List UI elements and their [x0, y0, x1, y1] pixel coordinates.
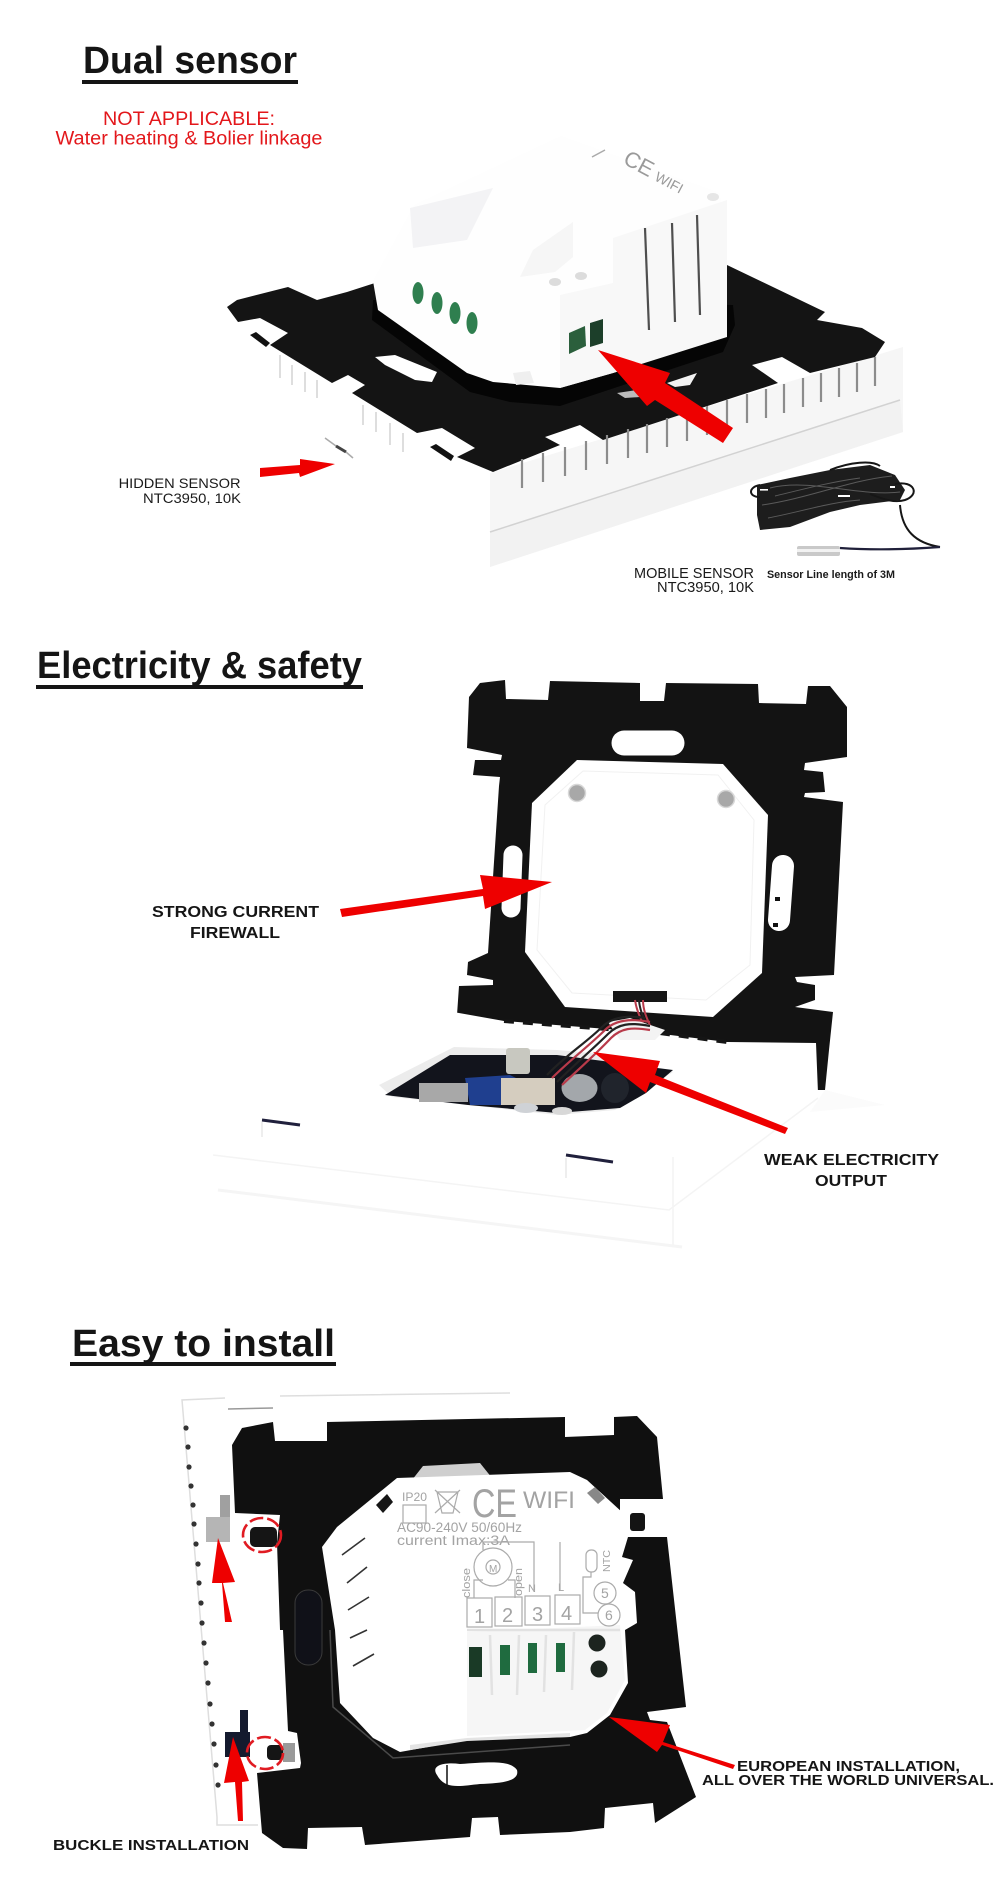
arrow: to european installation	[609, 1717, 735, 1769]
label: buckle installation: BUCKLE INSTALLATION	[53, 1838, 249, 1854]
notice: not applicable: NOT APPLICABLE:	[103, 109, 275, 130]
product photo: thermostat rear view: WIFI	[523, 1487, 575, 1514]
arrow: to hidden sensor	[260, 459, 335, 477]
product photo: open thermostat	[213, 680, 885, 1247]
label: strong current firewall: FIREWALL	[190, 925, 280, 942]
panel: easy to install	[53, 1323, 994, 1854]
arrows: buckle installation	[212, 1538, 249, 1821]
label: european installation: EUROPEAN INSTALLATION,	[737, 1758, 960, 1775]
product photo: thermostat rear view	[182, 1393, 696, 1849]
heading: Dual sensor: Dual sensor	[83, 40, 297, 82]
label: european installation: ALL OVER THE WORLD UNIVERSAL.	[702, 1772, 994, 1789]
notice: not applicable	[56, 109, 322, 150]
label: strong current firewall: STRONG CURRENT	[152, 904, 319, 921]
product photo: thermostat rear view: open	[513, 1568, 525, 1596]
product photo: thermostat rear with module: CE	[620, 145, 658, 182]
callout: buckle circles	[243, 1518, 283, 1769]
label: hidden sensor: HIDDEN SENSOR	[119, 475, 241, 491]
label: european installation	[702, 1758, 994, 1789]
label: mobile sensor: MOBILE SENSOR	[634, 566, 754, 582]
product photo: thermostat rear with module	[227, 136, 903, 567]
label: weak electricity output	[764, 1152, 939, 1190]
label: mobile sensor	[634, 566, 754, 596]
icon: sensor cable and probe	[751, 463, 940, 556]
label: strong current firewall	[152, 904, 319, 942]
product photo: thermostat rear view: L	[558, 1582, 564, 1594]
panel: dual sensor	[56, 40, 940, 596]
product photo: thermostat rear view: 4	[561, 1603, 572, 1625]
label: weak electricity output: OUTPUT	[815, 1173, 887, 1190]
product photo: thermostat rear view: N	[528, 1583, 536, 1595]
product photo: thermostat rear view: 6	[605, 1607, 613, 1623]
heading: Electricity & safety: Electricity & safety	[37, 645, 362, 687]
panel: electricity and safety	[36, 645, 939, 1247]
label: hidden sensor	[119, 475, 242, 506]
product photo: thermostat rear view: 3	[532, 1604, 543, 1626]
product photo: thermostat rear view: CE	[472, 1482, 517, 1526]
product photo: thermostat rear view: 1	[474, 1606, 485, 1628]
product photo: thermostat rear view: close	[461, 1568, 473, 1598]
product photo: thermostat rear view: current Imax:3A	[397, 1533, 510, 1548]
product photo: thermostat rear view: 2	[502, 1605, 513, 1627]
arrow: to mobile sensor port	[598, 350, 733, 443]
product photo: thermostat rear view: NTC	[602, 1550, 613, 1572]
label: mobile sensor: NTC3950, 10K	[657, 580, 754, 596]
arrow: to electricity output	[593, 1052, 788, 1134]
label: weak electricity output: WEAK ELECTRICITY	[764, 1152, 939, 1169]
product photo: thermostat rear view: AC90-240V 50/60Hz	[397, 1520, 522, 1535]
product photo: thermostat rear view: M	[489, 1564, 497, 1575]
label: hidden sensor: NTC3950, 10K	[143, 490, 242, 506]
label: sensor line length: Sensor Line length of 3M	[767, 569, 895, 581]
heading: Easy to install: Easy to install	[72, 1323, 335, 1365]
arrow: to firewall	[340, 875, 552, 917]
product photo: thermostat rear view: IP20	[402, 1490, 427, 1504]
notice: not applicable: Water heating & Bolier linkage	[56, 128, 322, 150]
product photo: thermostat rear view: 5	[601, 1585, 609, 1601]
product photo: thermostat rear with module: WIFI	[652, 168, 686, 196]
